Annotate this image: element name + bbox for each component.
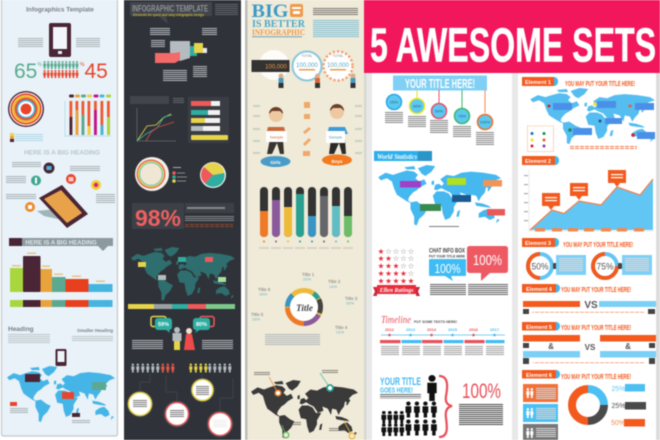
heading and copy — [185, 203, 234, 227]
chat heading: PUT YOUR TITLE HERE — [429, 254, 465, 258]
donut labels — [251, 272, 358, 334]
title bar: YOUR TITLE HERE! — [405, 76, 475, 91]
donut chart with title: Title — [296, 303, 313, 313]
pictogram people — [381, 375, 437, 436]
donut labels: 12% — [336, 330, 344, 334]
star ratings: ☆ — [400, 247, 407, 256]
donut labels: Title 4 — [335, 325, 348, 330]
total badges: TOTAL — [302, 54, 313, 58]
illustration: angled orange tablet — [37, 185, 88, 228]
panel: set 3 beige infographic — [245, 0, 366, 440]
chat heading: CHAT INFO BOX — [429, 248, 465, 254]
ring legend — [172, 167, 187, 183]
star ratings: ★ — [378, 269, 385, 278]
donut labels: 25% — [612, 403, 626, 410]
character: girls: Sample — [270, 134, 284, 140]
stat: 65 percent: 65 — [14, 60, 37, 83]
man and woman figures — [172, 327, 195, 350]
stat cards — [523, 384, 558, 440]
intro copy — [313, 8, 359, 37]
star ratings: ★ — [393, 269, 400, 278]
star ratings: ☆ — [408, 262, 415, 270]
donut chart with title — [288, 290, 320, 324]
body copy — [265, 334, 320, 346]
element 6 header: Element 6 — [526, 373, 552, 379]
versus block two: & — [548, 342, 554, 351]
title box — [130, 2, 238, 24]
versus block one — [523, 300, 656, 314]
donut labels — [611, 384, 646, 427]
star ratings: ☆ — [408, 247, 415, 256]
title box: INFOGRAPHIC TEMPLATE — [132, 4, 208, 14]
donut: 50 percent: 50% — [532, 262, 549, 272]
timeline: PUT SOME TEXTS HERE! — [414, 320, 457, 324]
heading: your title goes here: YOUR TITLE — [380, 376, 421, 388]
timeline — [380, 315, 505, 355]
star ratings: ★ — [385, 269, 392, 278]
chat bubble blue — [429, 259, 466, 281]
stat: 98 percent: 98% — [135, 205, 181, 231]
people rows — [43, 61, 78, 78]
donut: 75 percent — [593, 254, 652, 278]
hanging percent circles: 50% — [435, 108, 443, 114]
map legend — [528, 126, 554, 152]
character: girls: Girls — [270, 160, 281, 165]
connector lines — [140, 374, 233, 411]
donut labels: 50% — [611, 420, 625, 427]
panel: set 5 orange and blue infographic — [512, 73, 660, 440]
icon: tablet — [49, 23, 71, 57]
heading: infographics template: Infographics Template — [26, 6, 94, 14]
star ratings: ★ — [378, 276, 385, 286]
star ratings: ☆ — [393, 254, 400, 263]
title box: Elements for quick and easy infographic design — [133, 12, 204, 17]
element 2 header — [522, 156, 559, 165]
heading: here is a big heading: HERE IS A BIG HEADING — [24, 150, 100, 156]
text blocks beside tablet — [18, 37, 100, 47]
stat: 45 percent: % — [80, 62, 85, 68]
speech bubbles: 59% — [158, 322, 169, 328]
legend strip — [10, 300, 112, 307]
area chart — [524, 170, 654, 232]
heading and copy — [8, 326, 113, 343]
ratings ribbon: Ellen Ratings — [379, 288, 414, 294]
donut: 50 percent — [528, 254, 586, 278]
star ratings: ☆ — [400, 262, 407, 270]
donut chart — [572, 389, 604, 421]
star ratings: ★ — [385, 254, 392, 263]
element 5 header: Element 5 — [526, 325, 552, 331]
element 3 header — [522, 238, 633, 249]
title: big is better infographic: INFOGRAPHIC — [252, 28, 305, 37]
element 6 header — [522, 370, 631, 381]
character: boys: Boys — [331, 159, 343, 164]
heading: your title goes here: GOES HERE! — [380, 386, 413, 394]
callout text blocks — [150, 28, 217, 82]
map caption — [429, 225, 459, 228]
star ratings: ★ — [393, 262, 400, 270]
heading: world statistics: World Statistics — [377, 152, 417, 161]
ratings ribbon — [373, 285, 420, 296]
donut labels: Title 2 — [328, 279, 341, 284]
hanging percent circles: 100% — [480, 120, 491, 124]
stat: 100 percent: 100% — [462, 380, 501, 403]
total badges: 100,000 — [327, 63, 350, 69]
world map with labels — [530, 88, 655, 144]
star ratings: ☆ — [408, 254, 415, 263]
hanging percent circles: 75% — [458, 114, 466, 118]
map note — [570, 146, 637, 150]
timeline: 2015 — [448, 327, 458, 332]
panel: set 2 dark infographic — [124, 0, 241, 440]
donut labels: 25% — [612, 386, 626, 393]
star ratings: ★ — [378, 254, 385, 263]
copy — [459, 403, 503, 425]
star ratings: ★ — [393, 276, 400, 286]
chat bubble red — [467, 246, 508, 281]
element 1 header: Element 1 — [525, 80, 551, 86]
element 4 header — [522, 284, 631, 294]
timeline: Timeline — [381, 315, 411, 326]
star ratings: ★ — [400, 269, 407, 278]
title bar — [393, 76, 487, 91]
world map dark teal — [131, 247, 235, 301]
donut labels: Title 3 — [345, 296, 358, 301]
red brace — [439, 376, 452, 437]
bar chart: stepped colored bars — [10, 252, 112, 292]
ribbon heading — [9, 238, 113, 251]
star ratings: ☆ — [385, 247, 392, 256]
versus block two: & — [625, 342, 631, 351]
total badges — [252, 50, 352, 80]
pie chart — [200, 162, 226, 188]
black world map with pins — [251, 370, 358, 439]
heading and copy: Heading — [8, 326, 34, 333]
center icons — [303, 102, 311, 156]
hanging percent circles — [386, 90, 492, 130]
timeline: 2012 — [385, 327, 395, 332]
title: big is better infographic: IS BETTER — [252, 19, 306, 30]
element 5 header — [522, 322, 631, 332]
donut labels: 20% — [346, 300, 354, 306]
hanging percent circles: 40% — [413, 104, 421, 108]
heading: your title goes here — [380, 376, 421, 398]
versus block two: VS — [585, 343, 596, 352]
star ratings: ☆ — [400, 254, 407, 263]
chat copy — [430, 283, 508, 295]
donut labels: 14% — [329, 284, 337, 289]
versus block two — [523, 335, 656, 364]
timeline: 2013 — [406, 327, 416, 332]
circle callouts — [126, 378, 234, 438]
world map with callouts — [378, 165, 505, 226]
ribbon heading: HERE IS A BIG HEADING — [25, 240, 97, 246]
speech bubbles: 80% — [196, 322, 207, 328]
star ratings: ★ — [385, 276, 392, 286]
star ratings: ★ — [378, 247, 385, 256]
3d stepped bar chart — [155, 41, 207, 63]
legend: rings — [10, 133, 43, 142]
speech bubbles — [151, 316, 214, 333]
versus block one: VS — [584, 300, 598, 311]
star ratings: ★ — [400, 276, 407, 286]
total badges: 100,000 — [296, 63, 318, 69]
character: boys: Sample — [329, 134, 343, 140]
star ratings: ☆ — [408, 269, 415, 278]
donut labels: Title 1 — [302, 272, 315, 277]
text blocks around tablet — [6, 162, 115, 203]
hanging percent circles: 25% — [390, 100, 398, 104]
circular icons — [25, 162, 101, 212]
timeline: 2016 — [469, 327, 479, 332]
donut labels: Title 5 — [251, 312, 264, 317]
donut: 75 percent: 75% — [596, 262, 614, 272]
ring chart — [135, 157, 169, 191]
chat bubble blue: 100% — [434, 261, 461, 276]
side labels — [253, 105, 362, 154]
donut labels: 22% — [303, 276, 311, 282]
capsule bars — [259, 187, 353, 249]
legend strip — [128, 304, 235, 309]
title: big is better infographic — [252, 1, 306, 38]
horizontal progress bars — [188, 97, 229, 143]
text blocks — [132, 339, 233, 350]
small characters — [278, 74, 356, 88]
element 2 header: Element 2 — [525, 159, 551, 165]
donut labels: Title 6 — [258, 287, 271, 292]
star ratings: ★ — [408, 276, 415, 286]
stat: 65 percent: % — [37, 62, 42, 68]
icon: small tablet — [56, 349, 66, 366]
character: girls — [260, 107, 290, 167]
timeline: 2017 — [490, 327, 500, 332]
stat: 45 percent: 45 — [84, 60, 108, 83]
chat bubble red: 100% — [473, 252, 502, 269]
donut labels: 16% — [259, 292, 267, 296]
element 3 header: Element 3 — [525, 241, 551, 247]
star ratings: ★ — [378, 262, 385, 270]
total badges: 100,000 — [265, 64, 288, 70]
timeline: 2014 — [427, 327, 437, 332]
copy under circles — [385, 111, 494, 145]
line chart heading — [130, 96, 184, 104]
star ratings — [378, 247, 415, 286]
chart: concentric rings — [8, 91, 44, 127]
donut labels: 16% — [252, 316, 260, 322]
element 1 header — [522, 77, 635, 88]
character: boys — [322, 104, 352, 166]
heading and copy: Smaller Heading — [77, 328, 113, 333]
chat heading — [429, 248, 465, 258]
panel: set 4 white infographic — [366, 73, 512, 440]
bar chart: seven vertical bars — [65, 94, 111, 136]
line chart — [137, 108, 176, 141]
world map — [7, 366, 115, 424]
total badges: TOTAL — [333, 54, 344, 58]
title: big is better infographic: BIG — [252, 1, 289, 22]
star ratings: ☆ — [393, 247, 400, 256]
people rows — [131, 364, 231, 372]
panel: set 1 light infographic — [0, 0, 122, 440]
star ratings: ★ — [385, 262, 392, 270]
element 4 header: Element 4 — [526, 287, 553, 293]
